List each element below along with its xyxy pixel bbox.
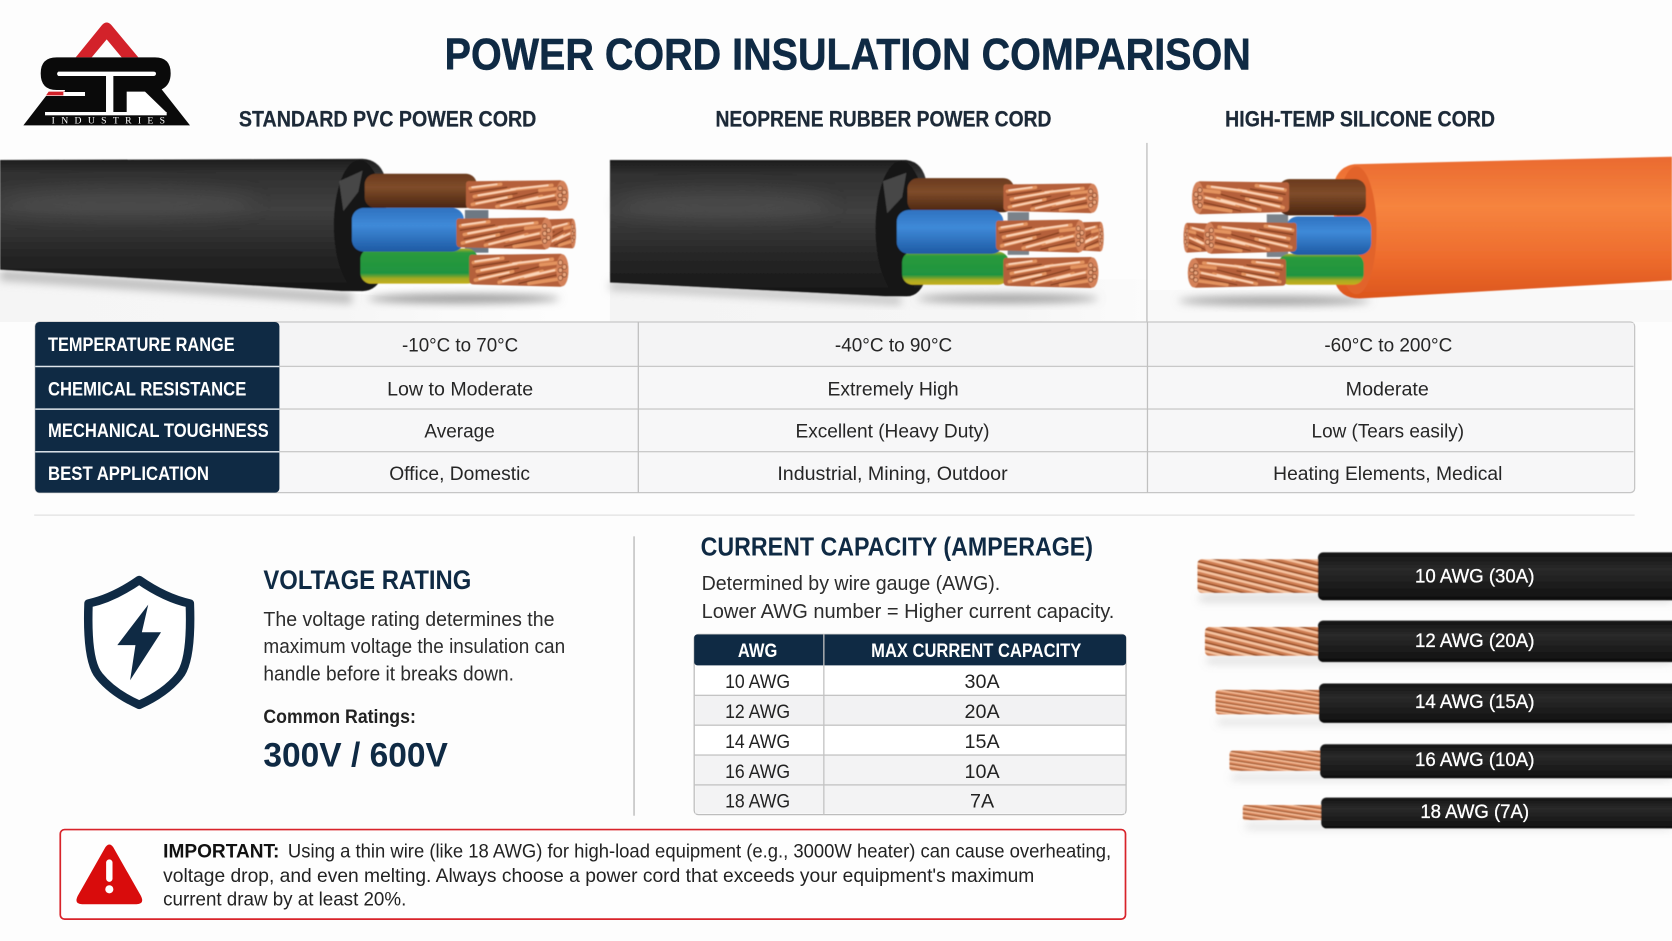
row: best application [48,464,1502,485]
photo: gauge wires [1197,552,1672,829]
row: temperature range: -60°C to 200°C [1324,335,1452,356]
row: best application: Office, Domestic [389,464,530,485]
row: best application: BEST APPLICATION [48,464,209,485]
icon: warning triangle [76,845,142,904]
text: warning message: IMPORTANT: [163,840,279,862]
panel: current capacity [694,534,1126,815]
table: AWG capacity [694,634,1126,815]
row: mechanical toughness [48,421,1464,443]
table: AWG capacity: 16 AWG [725,761,790,783]
row: temperature range: -10°C to 70°C [402,335,518,356]
row: mechanical toughness: MECHANICAL TOUGHNESS [48,421,269,442]
row: best application: Heating Elements, Medical [1273,464,1502,485]
text: warning message: current draw by at least 20%. [163,888,406,910]
panel: current capacity: CURRENT CAPACITY (AMPERAGE) [701,534,1093,562]
row: chemical resistance: Moderate [1346,380,1429,401]
table: AWG capacity: 14 AWG [725,731,790,753]
logo: SR Industries: INDUSTRIES [52,116,165,127]
text: warning message: Using a thin wire (like 18 AWG) for high-load equipment (e.g., 3000W heater) can cause overheating, [288,840,1111,862]
table: AWG capacity: 10 AWG [725,671,790,693]
text: voltage description: handle before it breaks down. [263,663,514,685]
panel: voltage rating: VOLTAGE RATING [263,565,471,595]
heading: neoprene column: NEOPRENE RUBBER POWER CORD [716,106,1051,131]
row: mechanical toughness: Excellent (Heavy Duty) [795,422,990,443]
row: chemical resistance [48,380,1429,401]
wire labels: 14 AWG (15A) [1415,692,1534,713]
row: mechanical toughness: Low (Tears easily) [1312,422,1464,443]
text: voltage description [263,609,565,685]
table: AWG capacity: MAX CURRENT CAPACITY [871,641,1081,662]
row: chemical resistance: CHEMICAL RESISTANCE [48,380,247,401]
wire labels: 12 AWG (20A) [1415,631,1534,652]
text: voltage description: maximum voltage the insulation can [263,636,565,658]
table: AWG capacity: 12 AWG [725,701,790,723]
photo: silicone cable [1178,157,1672,305]
wire labels [1415,567,1534,823]
row: chemical resistance: Extremely High [827,380,959,401]
panel: voltage rating [263,565,565,775]
callout: important warning [60,830,1125,919]
panel: voltage rating: 300V / 600V [263,737,448,775]
row: best application: Industrial, Mining, Outdoor [777,464,1008,485]
wire labels: 18 AWG (7A) [1420,802,1529,823]
text: warning message [163,840,1111,910]
heading: PVC column: STANDARD PVC POWER CORD [239,106,536,131]
comparison table [35,322,1635,493]
photo: PVC cable [0,159,576,303]
panel: current capacity: Determined by wire gauge (AWG). [702,573,1000,595]
table: AWG capacity: 20A [965,701,1000,723]
table: AWG capacity: 15A [965,731,1000,753]
photo: neoprene cable [610,160,1104,303]
wire labels: 10 AWG (30A) [1415,567,1534,588]
text: voltage description: The voltage rating determines the [263,609,554,631]
heading: silicone column: HIGH-TEMP SILICONE CORD [1225,106,1495,131]
row: temperature range [48,335,1452,356]
row: temperature range: TEMPERATURE RANGE [48,335,235,356]
wire labels: 16 AWG (10A) [1415,750,1534,771]
table: AWG capacity: AWG [738,641,777,662]
table: AWG capacity: 10A [965,761,1000,783]
icon: shield with lightning bolt [88,580,190,705]
panel: voltage rating: Common Ratings: [263,707,416,728]
row: temperature range: -40°C to 90°C [835,335,952,356]
text: warning message: voltage drop, and even melting. Always choose a power cord that exceeds your equipment's maximum [163,865,1034,887]
table: AWG capacity: 30A [965,671,1000,693]
row: chemical resistance: Low to Moderate [387,380,533,401]
title: POWER CORD INSULATION COMPARISON [445,29,1251,79]
logo: SR Industries [23,22,190,127]
table: AWG capacity: 18 AWG [725,791,790,813]
table: AWG capacity: 7A [970,791,995,813]
row: mechanical toughness: Average [424,422,495,443]
panel: current capacity: Lower AWG number = Higher current capacity. [702,601,1114,623]
